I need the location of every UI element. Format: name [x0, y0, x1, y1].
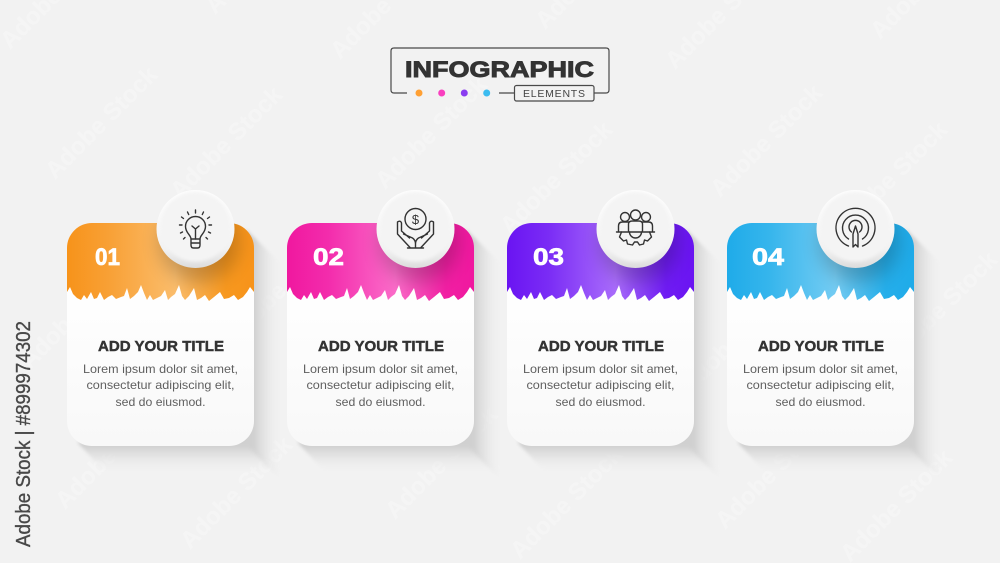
- subtitle box: [514, 86, 594, 101]
- icon: light bulb: [180, 210, 212, 248]
- coloured header: [727, 223, 914, 305]
- card body: [507, 285, 694, 446]
- watermark pattern: Adobe Stock: [370, 71, 493, 194]
- card text: Lorem ipsum dolor sit amet,: [743, 362, 898, 376]
- watermark pattern: Adobe Stock: [830, 116, 953, 239]
- card text: Lorem ipsum dolor sit amet,: [303, 362, 458, 376]
- long shadow: [517, 229, 723, 482]
- card text: consectetur adipiscing elit,: [746, 378, 894, 392]
- side credit: Adobe Stock | #899974302: [13, 321, 35, 547]
- icon disc: [816, 190, 894, 268]
- card text: sed do eiusmod.: [776, 395, 866, 409]
- icon shadow: [599, 202, 679, 282]
- card body: [727, 285, 914, 446]
- panel: card 01: [67, 190, 271, 466]
- number: 02: [313, 244, 344, 271]
- card text: consectetur adipiscing elit,: [306, 378, 454, 392]
- card body: [67, 285, 254, 446]
- card text: [83, 362, 238, 409]
- icon shadow: [819, 202, 899, 282]
- watermark pattern: Adobe Stock: [15, 251, 138, 374]
- card title: ADD YOUR TITLE: [758, 338, 884, 355]
- long shadow: [737, 229, 943, 482]
- card text: [303, 362, 458, 409]
- number: 03: [533, 244, 564, 271]
- watermark pattern: Adobe Stock: [50, 391, 173, 514]
- watermark pattern: Adobe Stock: [175, 431, 298, 554]
- icon disc: [596, 190, 674, 268]
- card title: ADD YOUR TITLE: [538, 338, 664, 355]
- icon: coin in hands: [398, 208, 434, 248]
- watermark pattern: Adobe: [345, 302, 417, 374]
- panel: card 03: [507, 190, 710, 464]
- watermark pattern: Adobe Stock: [705, 79, 828, 202]
- card text: Lorem ipsum dolor sit amet,: [83, 362, 238, 376]
- card text: consectetur adipiscing elit,: [526, 378, 674, 392]
- long shadow: [77, 229, 283, 482]
- icon disc: [156, 190, 234, 268]
- coloured header: [507, 223, 694, 305]
- watermark pattern: Adobe Stock: [505, 441, 628, 563]
- heading: INFOGRAPHIC: [405, 57, 594, 82]
- watermark pattern: Adobe Stock: [880, 246, 1000, 369]
- card text: [743, 362, 898, 409]
- icon: team and gear: [616, 210, 654, 245]
- colour dots: [416, 90, 490, 96]
- card title: ADD YOUR TITLE: [318, 338, 444, 355]
- icon shadow: [159, 202, 239, 282]
- card text: sed do eiusmod.: [116, 395, 206, 409]
- coloured header: [287, 223, 474, 305]
- card text: consectetur adipiscing elit,: [86, 378, 234, 392]
- panel: card 04: [727, 190, 931, 466]
- icon disc: [376, 190, 454, 268]
- watermark pattern: Adobe Stock: [710, 411, 833, 534]
- card body: [287, 285, 474, 446]
- card text: Lorem ipsum dolor sit amet,: [523, 362, 678, 376]
- subtitle: ELEMENTS: [523, 88, 585, 100]
- number: 01: [95, 244, 120, 271]
- panel: card 02: [287, 190, 490, 464]
- card text: sed do eiusmod.: [336, 395, 426, 409]
- icon shadow: [379, 202, 459, 282]
- watermark pattern: Adobe Stock: [675, 276, 798, 399]
- watermark pattern: Adobe Stock: [495, 116, 618, 239]
- title block: [391, 48, 609, 101]
- watermark pattern: Adobe Stock: [165, 81, 288, 204]
- card text: [523, 362, 678, 409]
- watermark pattern: Adobe Stock: [40, 61, 163, 184]
- coloured header: [67, 223, 254, 305]
- watermark pattern: Adobe Stock: [380, 401, 503, 524]
- long shadow: [297, 229, 503, 482]
- title frame: [391, 48, 609, 93]
- watermark pattern: Adobe: [220, 277, 292, 349]
- icon: target with arrow: [836, 208, 875, 247]
- card text: sed do eiusmod.: [556, 395, 646, 409]
- card title: ADD YOUR TITLE: [98, 338, 224, 355]
- number: 04: [752, 244, 785, 271]
- dollar sign: $: [412, 212, 420, 227]
